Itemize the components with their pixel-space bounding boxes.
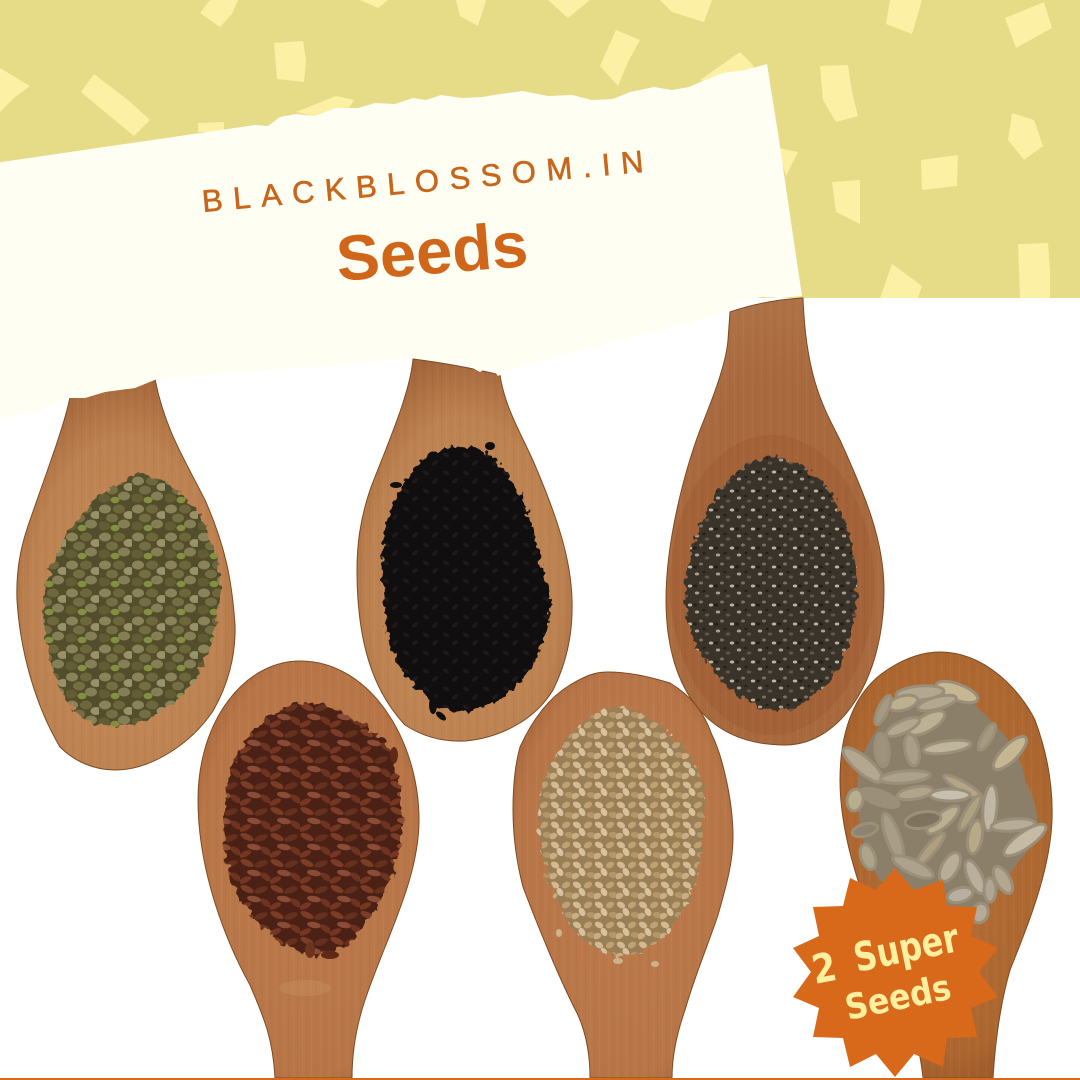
site name: BLACKBLOSSOM.IN xyxy=(200,144,645,219)
badge text line 2: Seeds xyxy=(842,968,955,1029)
spoon: bottom middle sesame seeds xyxy=(513,672,733,1078)
spoon: bottom right sunflower seeds xyxy=(839,652,1052,1078)
seeds: hemp xyxy=(42,472,222,728)
background: yellow band xyxy=(0,0,1080,298)
heading: Seeds: Seeds xyxy=(333,208,531,295)
confetti pattern xyxy=(0,0,1052,298)
badge text line 1: Super xyxy=(850,915,963,982)
bottom rule xyxy=(0,1078,1080,1080)
seeds: sesame xyxy=(536,706,706,967)
spoon: top right chia seeds xyxy=(666,298,884,745)
spoon: top left hemp seeds xyxy=(17,379,235,770)
badge text line 1: 2 xyxy=(808,944,840,994)
seeds: flax xyxy=(222,702,405,959)
seeds: chia xyxy=(683,454,860,712)
seeds: black cumin xyxy=(380,442,552,720)
badge text line 1 xyxy=(808,915,963,994)
torn paper banner xyxy=(0,64,802,420)
spoon: bottom left flax seeds xyxy=(198,661,419,1078)
spoon: top middle black seeds xyxy=(357,359,572,741)
seeds: sunflower xyxy=(839,677,1050,925)
badge: 2 Super Seeds xyxy=(793,868,998,1077)
